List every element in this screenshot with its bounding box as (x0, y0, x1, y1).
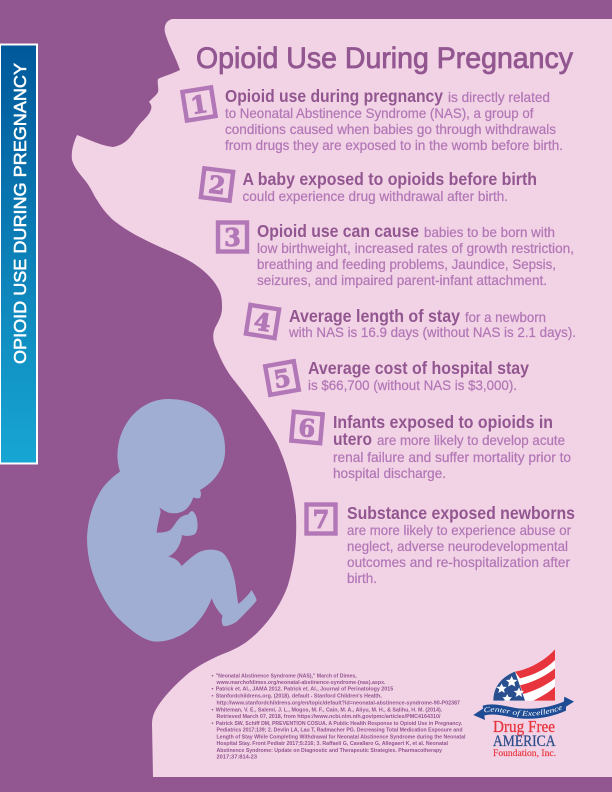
references: Pediatrics 2017;139; 2. Devlin LA, Lau T, Radmacher PG. Decreasing Total Medication Exposure and (216, 728, 463, 734)
logo wordmark (493, 717, 556, 758)
item 4 text: for a newborn (465, 310, 546, 325)
item 3 text (257, 221, 574, 288)
item 5 text: Average cost of hospital stay (308, 358, 529, 378)
references: • (212, 694, 214, 700)
number block 2 (201, 168, 233, 201)
references: Stanfordchildrens.org. (2018). default - Stanford Children's Health, (216, 694, 382, 700)
item 6 text (333, 412, 571, 481)
item 1 text (225, 86, 563, 153)
item 1 text: conditions caused when babies go through withdrawals (225, 122, 556, 137)
item 2 text (242, 169, 537, 204)
item 7 text: Substance exposed newborns (347, 503, 575, 523)
number block 1 (182, 87, 216, 121)
logo: Drug Free America (474, 650, 574, 758)
references: Length of Stay While Completing Withdrawal for Neonatal Abstinence Syndrome during the Neonatal (216, 734, 466, 740)
number block 3: 3 (224, 223, 241, 252)
item 5 (265, 358, 529, 395)
logo wordmark: AMERICA (493, 733, 556, 750)
sidebar label: OPIOID USE DURING PREGNANCY (10, 63, 30, 364)
item 3 text: seizures, and impaired parent-infant attachment. (257, 273, 547, 288)
references: • (212, 687, 214, 693)
references: Patrick SW, Schiff DM, PREVENTION COSUA. A Public Health Response to Opioid Use in Pregnancy. (216, 721, 463, 727)
item 7 (306, 503, 575, 586)
references: Abstinence Syndrome: Update on Diagnostic and Therapeutic Strategies. Pharmacotherapy (216, 748, 443, 754)
item 5 text (308, 358, 529, 393)
sidebar banner (0, 44, 37, 464)
references: Patrick et. Al., JAMA 2012. Patrick et. Al., Journal of Perinatology 2015 (216, 687, 393, 693)
number block 7: 7 (313, 505, 329, 534)
title: Opioid Use During Pregnancy (196, 42, 573, 75)
icon: waving flag (493, 649, 555, 701)
item 2 (201, 168, 537, 204)
number block 5: 5 (271, 363, 293, 394)
references: Hospital Stay. Front Pediatr 2017;5:216; 3. Raffaeli G, Cavallaro G, Allegaert K, et al. Neonatal (216, 741, 448, 747)
item 1 text: to Neonatal Abstinence Syndrome (NAS), a group of (225, 106, 534, 121)
item 6 text: Infants exposed to opioids in (333, 412, 553, 432)
number block 6 (291, 412, 323, 444)
item 3 text: Opioid use can cause (257, 221, 419, 241)
item 1 text: Opioid use during pregnancy (225, 86, 443, 106)
references: • (212, 721, 214, 727)
item 6 text: are more likely to develop acute (377, 433, 565, 448)
number block 1: 1 (189, 89, 210, 120)
references: Retrieved March 07, 2018, from https://www.ncbi.nlm.nih.gov/pmc/articles/PMC4164310/ (216, 714, 441, 720)
item 7 text (347, 503, 575, 586)
number block 4 (246, 305, 279, 339)
references: http://www.stanfordchildrens.org/en/topic/default?id=neonatal-abstinence-syndrome-90-P02387 (216, 700, 460, 706)
ribbon banner: Center of Excellence (484, 706, 562, 717)
logo wordmark: Drug Free (493, 717, 555, 736)
item 3 text: low birthweight, increased rates of growth restriction, (257, 241, 574, 256)
item 6 text: renal failure and suffer mortality prior to (333, 450, 571, 465)
item 4 text: Average length of stay (289, 306, 460, 326)
item 3 (218, 221, 574, 288)
item 6 (291, 412, 571, 481)
item 4 (246, 305, 576, 340)
references (212, 673, 466, 761)
item 7 text: birth. (347, 571, 377, 586)
item 1 (182, 86, 563, 153)
item 4 text: with NAS is 16.9 days (without NAS is 2.1 days). (288, 325, 576, 340)
number block 4: 4 (252, 306, 273, 338)
references: 2017;37:814-23 (216, 755, 257, 761)
item 7 text: neglect, adverse neurodevelopmental (347, 539, 568, 554)
item 3 text: babies to be born with (424, 225, 555, 240)
references: • (212, 707, 214, 713)
item 6 text: utero (333, 429, 372, 449)
item 7 text: are more likely to experience abuse or (347, 523, 571, 538)
fetus illustration (87, 399, 257, 642)
item 3 text: breathing and feeding problems, Jaundice, Sepsis, (257, 257, 556, 272)
number block 3 (218, 222, 247, 252)
references: www.marchofdimes.org/neonatal-abstinence-syndrome-(nas).aspx. (216, 680, 386, 686)
item 2 text: A baby exposed to opioids before birth (242, 169, 537, 189)
references: • (212, 673, 214, 679)
item 1 text: from drugs they are exposed to in the womb before birth. (225, 138, 563, 153)
number block 6: 6 (297, 413, 317, 443)
number block 2: 2 (207, 170, 227, 200)
references: Whiteman, V. E., Salemi, J. L., Mogos, M. F., Cain, M. A., Aliyu, M. H., & Salihu, H. M. (2014). (216, 707, 443, 713)
item 1 text: is directly related (448, 90, 550, 105)
item 5 text: is $66,700 (without NAS is $3,000). (308, 378, 517, 393)
number block 7 (306, 504, 336, 534)
item 4 text (288, 306, 576, 340)
logo wordmark: Foundation, Inc. (493, 748, 556, 758)
item 6 text: hospital discharge. (333, 466, 446, 481)
number block 5 (265, 361, 299, 395)
item 2 text: could experience drug withdrawal after birth. (242, 189, 508, 204)
item 7 text: outcomes and re-hospitalization after (347, 555, 570, 570)
references: "Neonatal Abstinence Syndrome (NAS)," March of Dimes, (216, 673, 357, 679)
